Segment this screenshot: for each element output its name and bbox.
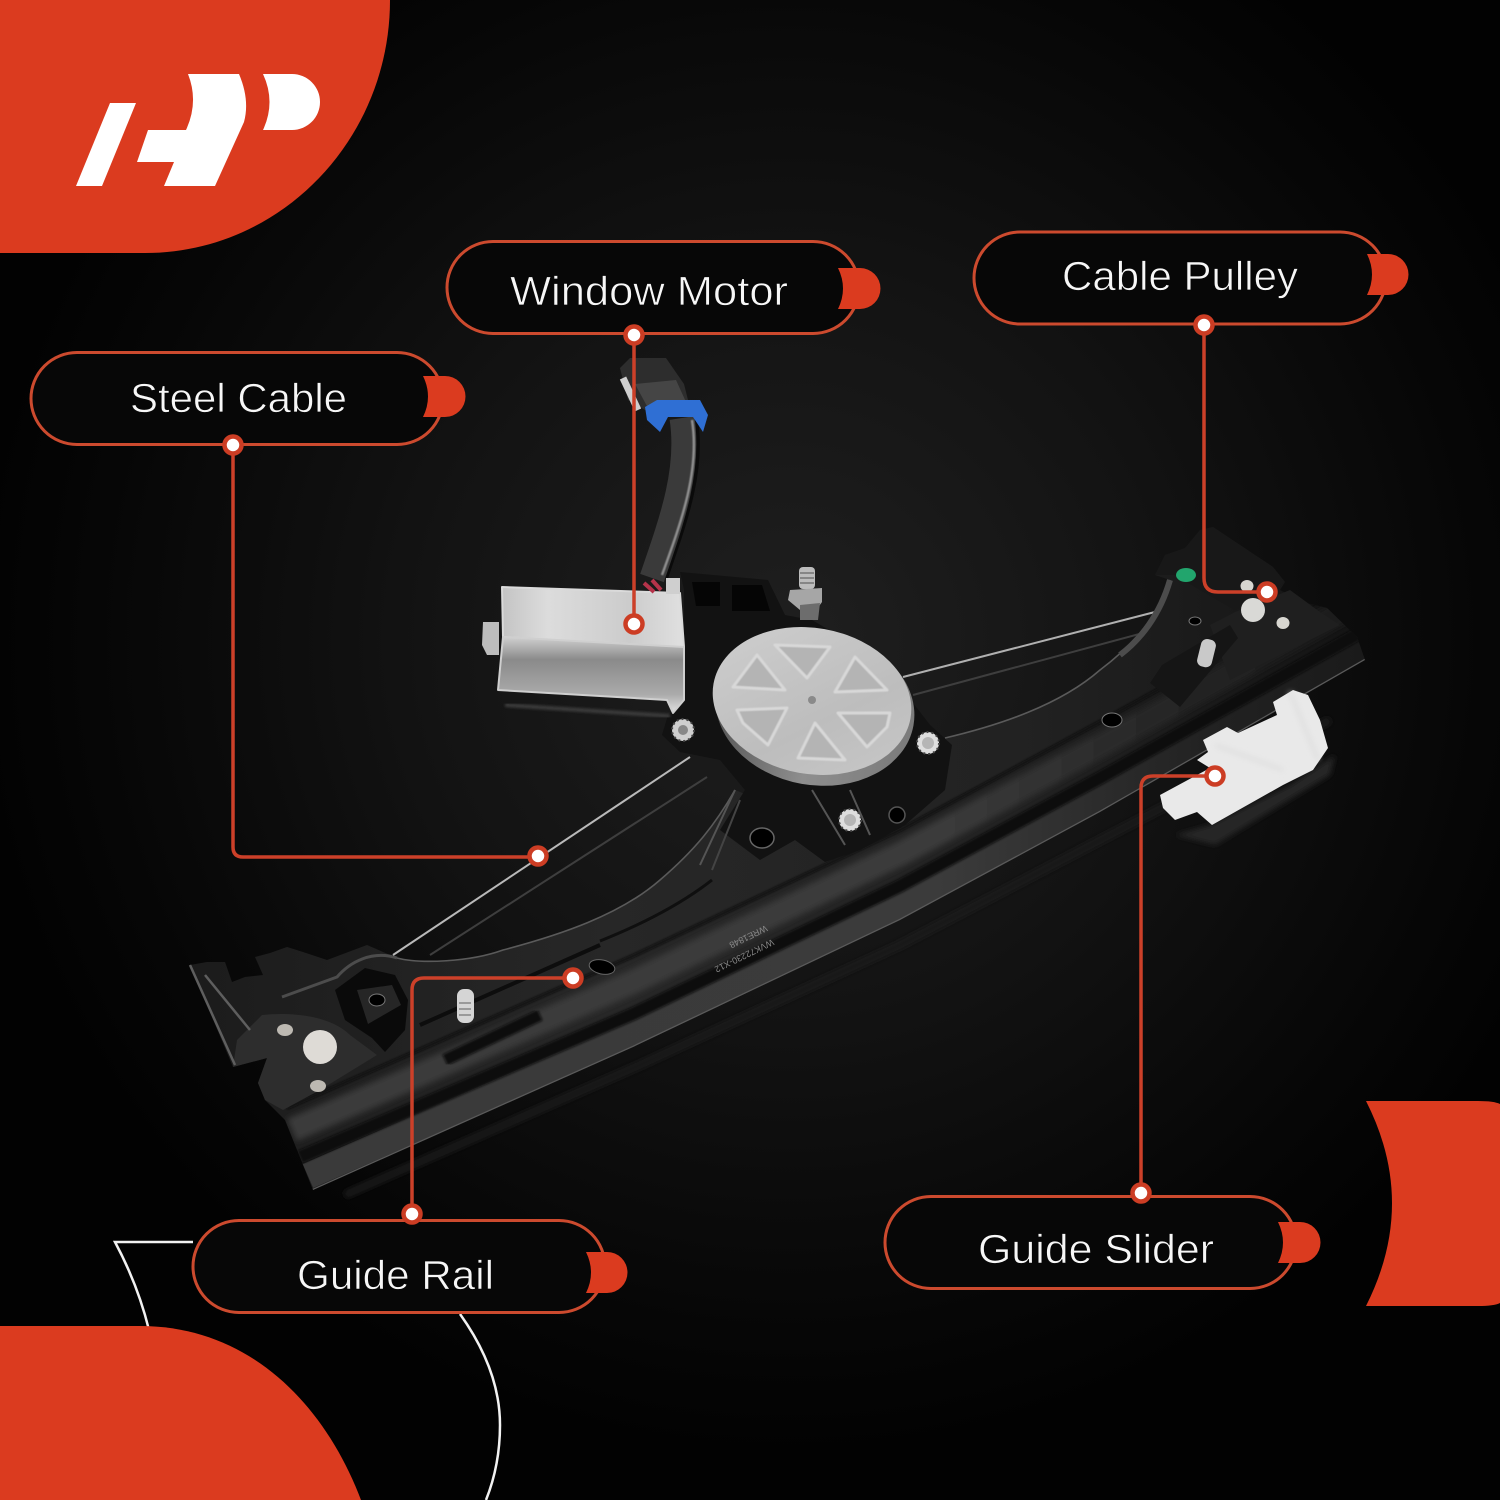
decorative bottom-left shape with white outline xyxy=(0,1242,500,1500)
reflection under rail xyxy=(345,720,1330,1195)
product: window regulator xyxy=(190,358,1365,1195)
stamped part codes: WVK72230-X12 xyxy=(713,937,776,974)
icon: A-Premium logo mark xyxy=(76,74,320,186)
callout: Window Motor xyxy=(447,242,880,632)
rail and arm body xyxy=(190,527,1365,1190)
decorative right-edge red shape xyxy=(1366,1101,1500,1306)
gear cover disc xyxy=(701,612,927,801)
threaded stud xyxy=(1196,638,1217,669)
embossed sectors xyxy=(733,645,890,760)
guide slider xyxy=(1160,690,1335,845)
threaded stud xyxy=(457,989,474,1023)
mounting holes xyxy=(750,828,774,848)
callout: Guide Slider: Guide Slider xyxy=(978,1226,1214,1272)
green marker xyxy=(1176,568,1196,582)
leader line xyxy=(632,335,636,624)
wiring harness and connector xyxy=(620,358,708,594)
callout: Steel Cable xyxy=(31,352,546,864)
leader line xyxy=(412,978,573,1214)
callout: Cable Pulley xyxy=(974,232,1408,600)
leader line xyxy=(1204,325,1267,592)
callout: Guide Slider xyxy=(885,768,1320,1288)
logo corner panel xyxy=(0,0,390,253)
leader line xyxy=(1141,776,1215,1193)
steel cable xyxy=(393,612,1155,955)
rail grooves xyxy=(287,600,1365,1190)
motor gear housing xyxy=(662,572,952,870)
stamped part codes: WRE1848 xyxy=(728,923,769,950)
motor can xyxy=(482,587,684,716)
callout: Guide Rail: Guide Rail xyxy=(297,1252,494,1298)
callout: Window Motor: Window Motor xyxy=(510,268,788,314)
mounting stud xyxy=(788,567,822,620)
left end plate xyxy=(190,955,616,1110)
nuts xyxy=(672,719,939,831)
right end bracket xyxy=(1102,527,1340,727)
callout: Cable Pulley: Cable Pulley xyxy=(1062,253,1299,299)
slot hole xyxy=(588,957,616,977)
callout: Guide Rail xyxy=(193,970,627,1312)
callout: Steel Cable: Steel Cable xyxy=(130,375,347,421)
rivets xyxy=(1241,598,1265,622)
leader line xyxy=(233,445,538,857)
upper arm highlights xyxy=(397,580,1170,1025)
rivets xyxy=(303,1030,337,1064)
